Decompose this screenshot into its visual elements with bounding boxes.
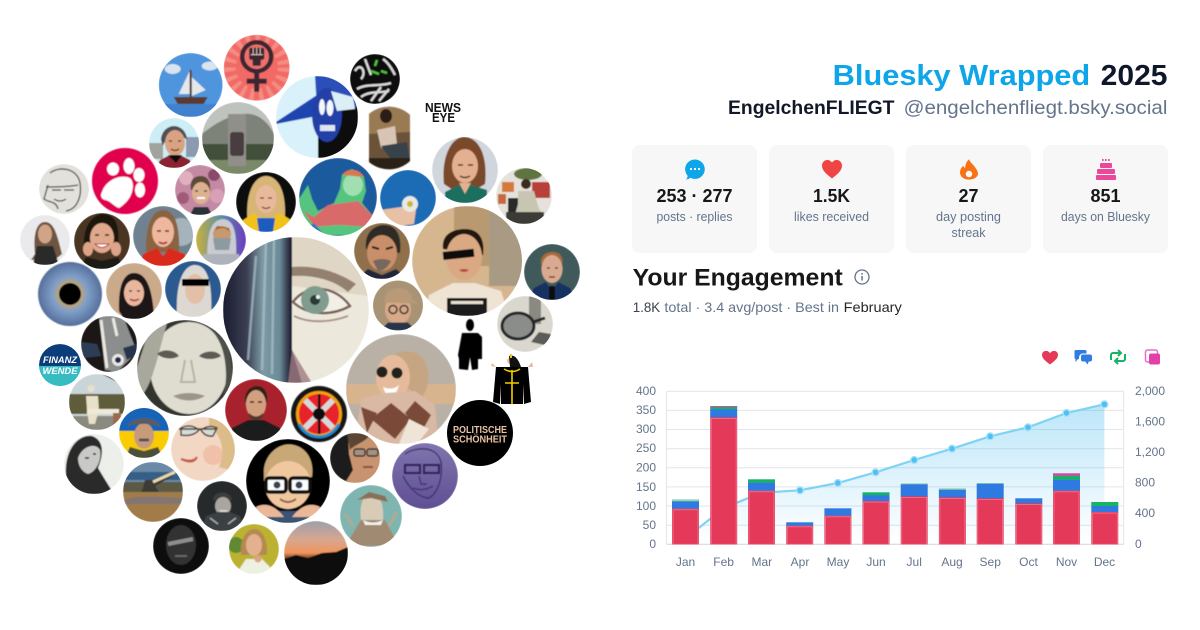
bar: Jul xyxy=(901,483,928,544)
avatar: man with beanie xyxy=(197,481,247,531)
avatar: laughing woman with sunglasses xyxy=(346,334,456,444)
avatar: man on red background xyxy=(225,379,287,441)
avatar: Politische Schönheit logo xyxy=(447,400,513,466)
avatar: sitting woman in room xyxy=(369,107,410,169)
panel: days on Bluesky: days on Bluesky xyxy=(1061,210,1151,224)
avatar: blue iris eye xyxy=(38,262,102,326)
bar: Nov xyxy=(1053,473,1080,544)
month labels: Mar xyxy=(751,555,772,569)
engagement summary text: total · 3.4 avg/post · Best in xyxy=(664,299,839,315)
right axis labels: 400 xyxy=(1135,506,1155,520)
bar: Feb xyxy=(710,406,737,544)
avatar: close-up of glasses xyxy=(497,296,553,352)
avatar cluster xyxy=(20,35,580,585)
cumulative area xyxy=(686,404,1104,544)
avatar: black face with white stripes xyxy=(153,518,209,574)
avatar: young man with censor bar xyxy=(412,206,523,316)
bar: Apr xyxy=(786,522,813,544)
left axis labels xyxy=(636,384,656,551)
left axis labels: 200 xyxy=(636,460,656,474)
legend icons xyxy=(1042,350,1160,364)
month labels: Dec xyxy=(1094,555,1115,569)
subtitle: name and handle: @engelchenfliegt.bsky.social xyxy=(904,97,1167,119)
month labels xyxy=(676,555,1115,569)
icon: black suit silhouette xyxy=(458,319,482,370)
bar: Dec xyxy=(1091,502,1118,544)
month labels: Nov xyxy=(1056,555,1077,569)
icon: Munich monk figure xyxy=(491,354,533,404)
avatar: Politische Schönheit logo: POLITISCHE xyxy=(453,424,507,436)
avatar: Politische Schönheit logo: SCHÖNHEIT xyxy=(453,432,508,446)
panel: days on Bluesky: 851 xyxy=(1090,185,1120,206)
avatar: man in building courtyard xyxy=(149,118,200,168)
avatar: pencil sketch man xyxy=(39,164,89,214)
engagement summary text: 1.8K xyxy=(633,299,661,315)
icon: birthday cake xyxy=(1096,159,1116,180)
month labels: Sep xyxy=(980,555,1001,569)
icon: legend reposts xyxy=(1111,350,1125,364)
heading: Your Engagement: Your Engagement xyxy=(633,265,843,292)
bar: Jan xyxy=(672,499,699,544)
avatar: purple sketch of man xyxy=(392,443,458,509)
avatar: feminist fist xyxy=(224,35,290,101)
panel: days on Bluesky xyxy=(1043,145,1168,253)
icon: legend quotes xyxy=(1146,350,1160,364)
avatar: man with stern look xyxy=(354,223,410,279)
month labels: Aug xyxy=(941,555,963,569)
avatar: sunset over trees xyxy=(284,521,348,585)
cumulative line xyxy=(686,404,1104,539)
panel: posts and replies: 253 · 277 xyxy=(656,185,732,206)
avatar: man with glasses on dark xyxy=(330,433,380,483)
avatar: man among pink flowers xyxy=(175,165,225,215)
left axis labels: 100 xyxy=(636,499,656,513)
bar: Jun xyxy=(862,492,890,544)
avatar: daisy in hand xyxy=(380,170,436,226)
logo: News Eye xyxy=(425,101,461,125)
left axis labels: 50 xyxy=(643,518,656,532)
left axis labels: 300 xyxy=(636,422,656,436)
chart: monthly engagement stacked bars with cumulative line xyxy=(636,384,1165,569)
month labels: Apr xyxy=(791,555,809,569)
icon: speech bubble xyxy=(685,159,705,179)
avatar: memoji with glasses xyxy=(246,439,330,523)
avatar: main portrait close-up of eye xyxy=(223,237,369,383)
logo: News Eye: NEWS xyxy=(425,101,461,115)
avatar: white-haired woman with black bar xyxy=(165,261,221,317)
bar: Oct xyxy=(1015,498,1042,544)
panel: likes received: 1.5K xyxy=(813,185,851,206)
panel: day posting streak: 27 xyxy=(958,185,978,206)
title: 2025 xyxy=(1101,60,1168,92)
panel: likes received xyxy=(769,145,894,253)
left axis labels: 150 xyxy=(636,480,656,494)
engagement summary text: February xyxy=(844,299,902,315)
left axis labels: 0 xyxy=(649,537,656,551)
avatar: sailing boat xyxy=(159,53,223,117)
panel: posts and replies xyxy=(632,145,757,253)
bar: May xyxy=(824,508,851,544)
right axis labels: 1,600 xyxy=(1135,414,1165,428)
panel: day posting streak xyxy=(906,145,1031,253)
icon: info xyxy=(855,270,869,284)
left axis labels: 250 xyxy=(636,441,656,455)
icon: legend likes xyxy=(1042,351,1058,364)
month labels: Jan xyxy=(676,555,695,569)
panel: day posting streak: day posting xyxy=(936,210,1001,224)
avatar: blue mural skull xyxy=(276,76,358,158)
avatar: man in navy jacket xyxy=(524,244,580,300)
right axis labels xyxy=(1135,384,1165,551)
icon: heart xyxy=(822,160,842,178)
panel: likes received: likes received xyxy=(794,210,869,224)
right axis labels: 1,200 xyxy=(1135,445,1165,459)
left axis labels: 400 xyxy=(636,384,656,398)
avatar: black and white woman xyxy=(64,434,124,494)
icon: flame xyxy=(960,159,978,180)
right axis labels: 2,000 xyxy=(1135,384,1165,398)
avatar: Finanzwende logo: WENDE xyxy=(42,366,79,376)
avatar: woman among green xyxy=(228,524,279,574)
avatar: blonde woman on black xyxy=(236,172,296,232)
bar: Mar xyxy=(748,479,775,544)
month labels: Jul xyxy=(907,555,922,569)
avatar: rocket launcher on steppe xyxy=(123,462,183,522)
avatar: woman with dark hair on peach xyxy=(106,263,162,319)
avatar: thermal image person xyxy=(299,158,377,236)
month labels: Feb xyxy=(713,555,734,569)
avatar: red paw logo xyxy=(92,148,158,214)
avatar: Berlin wall segment xyxy=(202,102,274,174)
month labels: Oct xyxy=(1019,555,1038,569)
avatar: Finanzwende logo xyxy=(39,344,81,386)
bar: Sep xyxy=(977,483,1004,544)
avatar: Finanzwende logo: FINANZ xyxy=(43,355,78,365)
icon: legend replies xyxy=(1074,350,1092,364)
month labels: Jun xyxy=(866,555,886,569)
right axis labels: 800 xyxy=(1135,476,1155,490)
avatar: black graffiti xyxy=(350,54,400,104)
month labels: May xyxy=(827,555,849,569)
avatar: teal cartoon character xyxy=(340,485,402,547)
bar: Aug xyxy=(939,488,966,544)
title: Bluesky Wrapped xyxy=(833,60,1090,92)
logo: News Eye: EYE xyxy=(432,111,455,125)
avatar: black Converse shoe xyxy=(81,316,137,372)
avatar: man with long hair, black shirt xyxy=(20,215,70,265)
avatar: man in cap on Ukrainian flag xyxy=(119,406,169,458)
avatar: man with cap and glasses xyxy=(372,280,424,331)
avatar: blonde woman with glasses xyxy=(171,417,235,481)
avatar: sepia woman close-up xyxy=(137,320,233,416)
avatar: woman in office with posters xyxy=(496,168,552,224)
avatar: smiling woman with hands on cheeks xyxy=(74,213,130,269)
right axis labels: 0 xyxy=(1135,537,1142,551)
left axis labels: 350 xyxy=(636,403,656,417)
panel: day posting streak: streak xyxy=(952,226,986,240)
chart grid and axes xyxy=(666,391,1124,544)
avatar: woman with brown hair xyxy=(432,137,498,203)
avatar: woman on terrace xyxy=(69,374,125,430)
engagement summary text xyxy=(633,299,902,315)
subtitle: name and handle: EngelchenFLIEGT xyxy=(728,97,895,119)
panel: posts and replies: posts · replies xyxy=(656,210,732,224)
subtitle: name and handle xyxy=(728,97,1167,119)
avatar: woman in red jacket xyxy=(133,206,195,266)
avatar: round Dortmund-style logo xyxy=(291,386,347,442)
avatar: hooded figure on rainbow xyxy=(196,215,246,265)
line markers xyxy=(797,401,1108,494)
